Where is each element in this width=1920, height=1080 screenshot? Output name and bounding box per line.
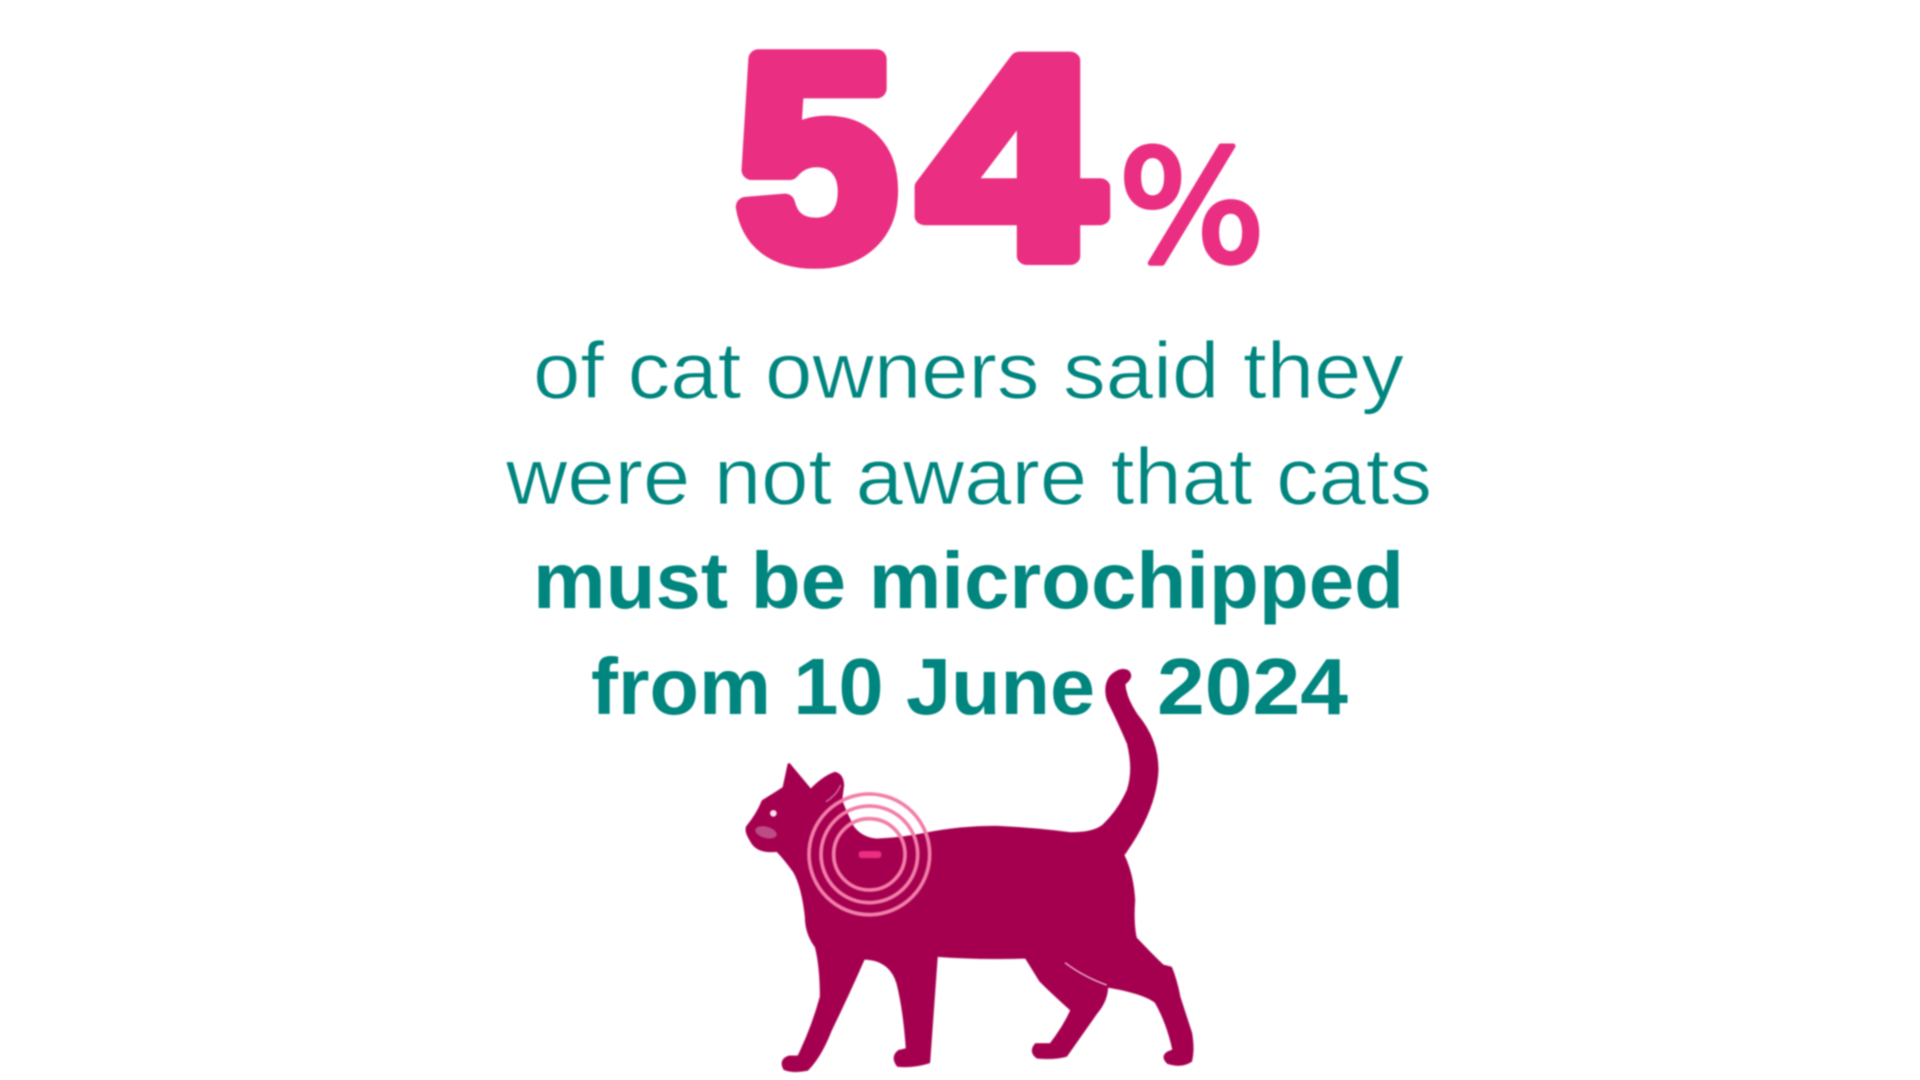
ear highlight <box>826 785 841 802</box>
digit 4: 4 <box>920 0 1104 316</box>
icon: cat with microchip <box>747 670 1192 1071</box>
big statistic: 54% <box>737 0 1265 317</box>
eye <box>770 810 777 817</box>
whisker patch <box>754 824 778 841</box>
statement text <box>505 326 1432 731</box>
line 1: of cat owners said they <box>533 326 1404 415</box>
line 2: were not aware that cats <box>505 432 1432 521</box>
line 4, bold date start: from 10 June <box>591 642 1095 731</box>
cat silhouette <box>747 670 1192 1071</box>
line 4, bold year: 2024 <box>1157 642 1349 731</box>
microchip <box>859 851 881 858</box>
percent sign: % <box>1118 117 1265 298</box>
digit 5: 5 <box>737 0 896 317</box>
line 3, bold: must be microchipped <box>533 536 1404 625</box>
hind leg crease <box>1065 963 1107 985</box>
signal rings <box>809 794 930 915</box>
